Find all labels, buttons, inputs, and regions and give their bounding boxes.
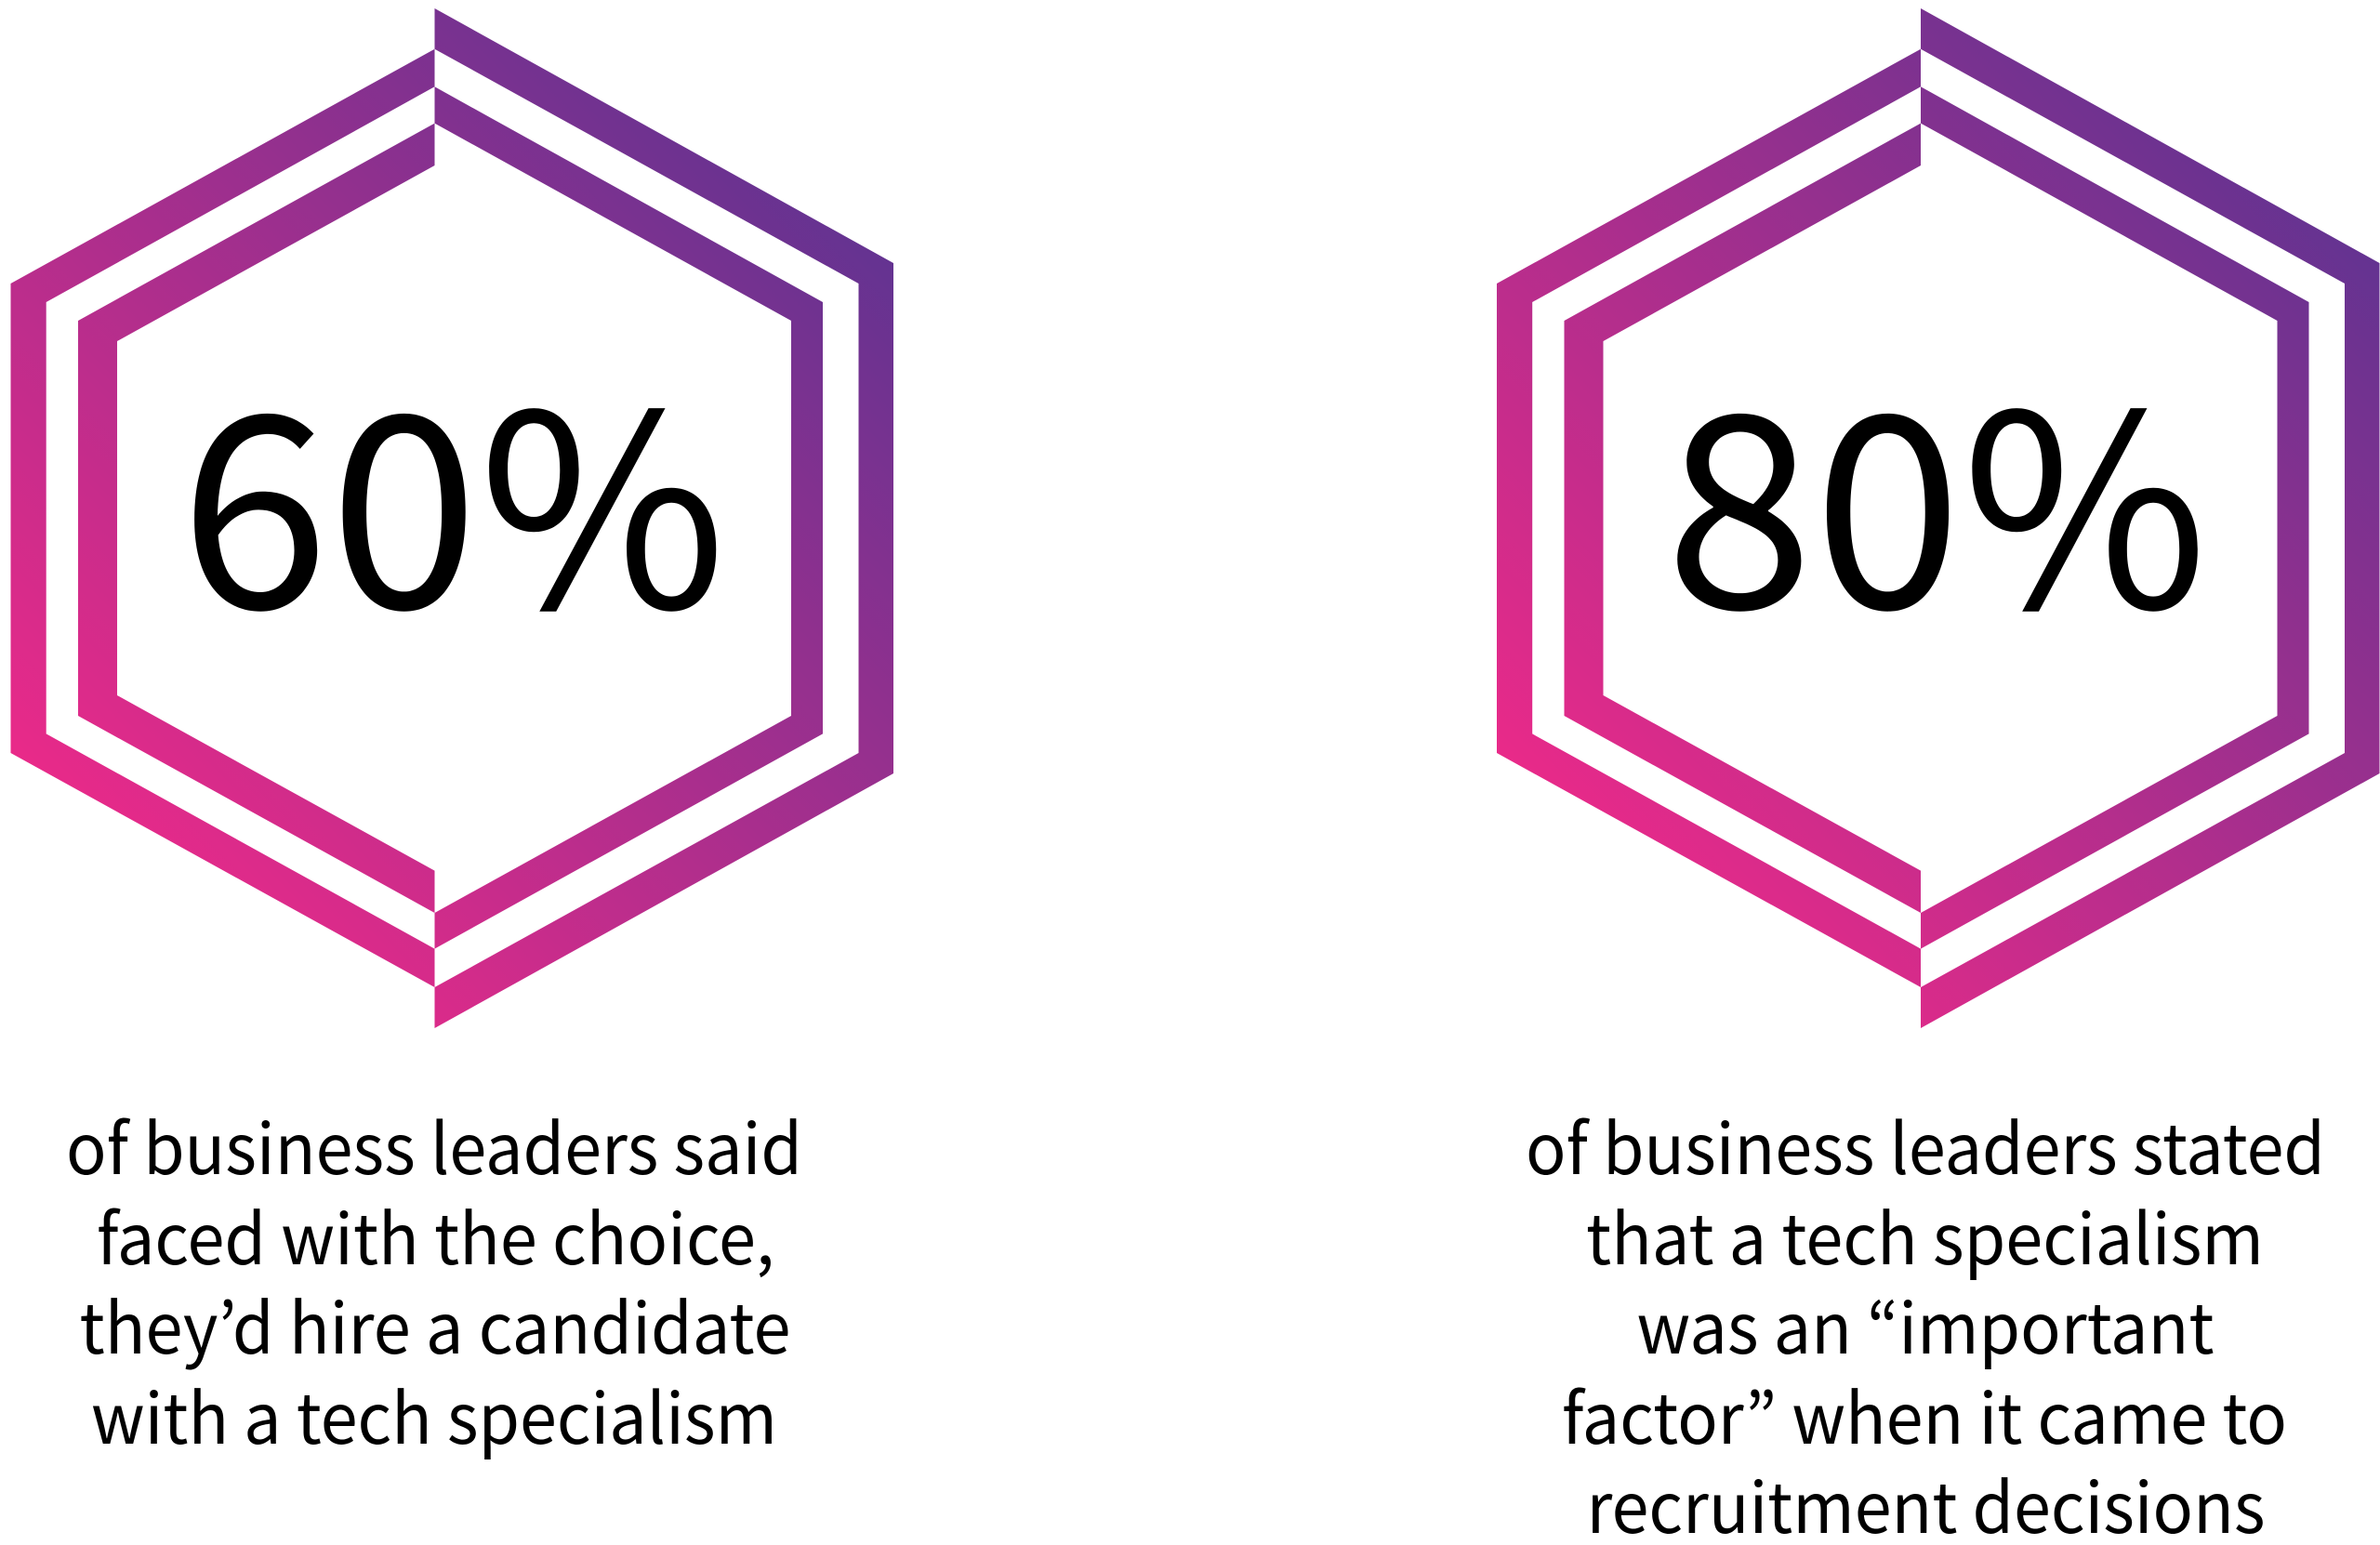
- number: 60%: 60%: [180, 297, 727, 685]
- text block: 80% description: factor” when it came to: [1562, 1363, 2287, 1464]
- panel: 60% statistic: [11, 8, 893, 1464]
- text block: 80% description: [1526, 1093, 2325, 1545]
- icon: double hexagon frame: [1497, 8, 2380, 1028]
- icon: double hexagon frame: [11, 8, 893, 1028]
- panel: 80% statistic: [1497, 8, 2380, 1545]
- text block: 80% description: was an “important: [1636, 1273, 2215, 1374]
- number: 80%: 80%: [1665, 297, 2208, 685]
- text block: 60% description: they’d hire a candidate: [80, 1273, 790, 1374]
- text block: 80% description: that a tech specialism: [1586, 1183, 2264, 1285]
- text block: 80% description: of business leaders stated: [1526, 1093, 2325, 1195]
- text block: 60% description: faced with the choice,: [97, 1183, 774, 1285]
- text block: 60% description: [66, 1093, 802, 1464]
- text block: 60% description: with a tech specialism: [91, 1363, 777, 1464]
- text block: 60% description: of business leaders said: [66, 1093, 802, 1195]
